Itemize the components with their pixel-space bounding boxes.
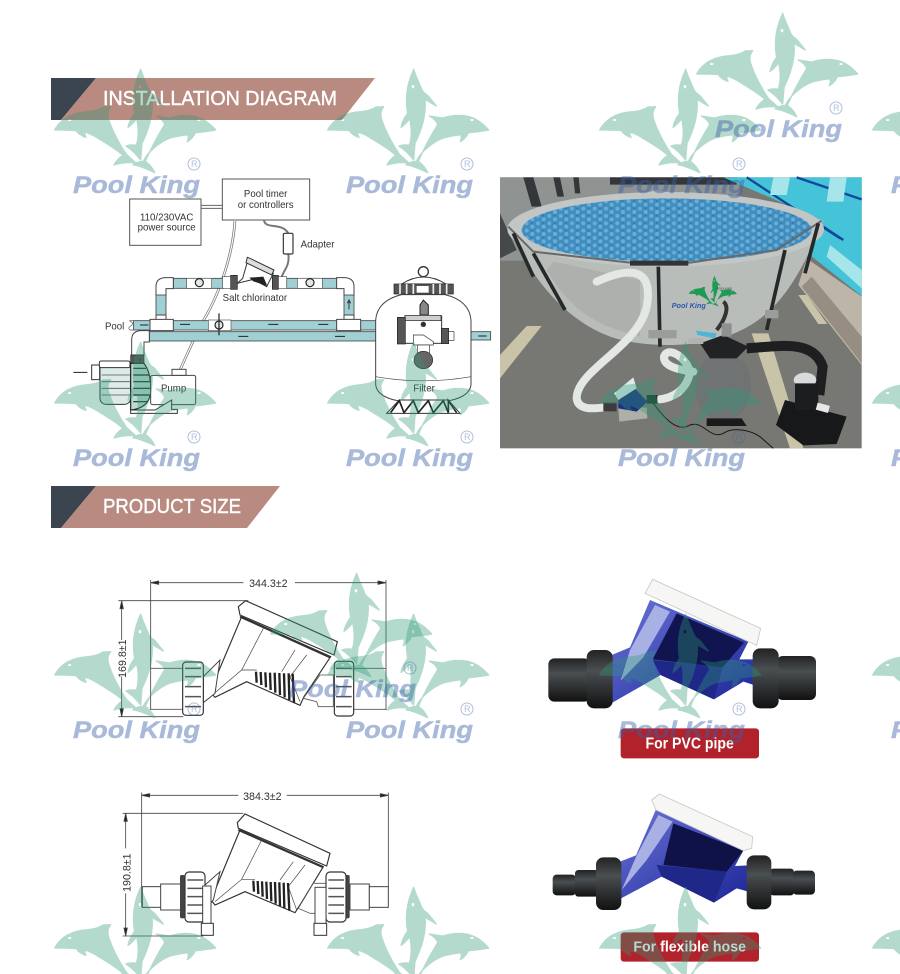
dimension: width: 344.3±2 — [249, 578, 288, 590]
pump: Pump — [161, 384, 186, 395]
watermark row 3 col 1: R — [191, 704, 198, 714]
dimension lines — [118, 580, 386, 717]
watermark row 3 col 4 — [873, 614, 900, 744]
label: for PVC pipe — [621, 728, 759, 758]
chlorinator outline — [205, 814, 330, 913]
watermark row 1 col 3: R — [736, 159, 743, 169]
background swimming pool — [723, 177, 862, 296]
dimension: width: 384.3±2 — [243, 791, 282, 803]
left union nut — [183, 662, 203, 715]
adapter — [264, 220, 335, 277]
ball valves — [187, 278, 322, 335]
watermark row 1 col 2 — [328, 69, 489, 199]
return pipe to pool: Pool — [105, 321, 124, 332]
watermark row 3 col 3 — [600, 614, 761, 744]
product photo: flexible hose version — [553, 794, 815, 962]
filter: Filter — [413, 384, 436, 395]
white control cap — [645, 579, 761, 645]
translucent blue body — [610, 600, 754, 704]
watermark row 1 col 4 — [873, 69, 900, 199]
black hose to pump — [747, 346, 823, 395]
label: for PVC pipe: For PVC pipe — [645, 735, 734, 752]
watermark extra top right: Pool King — [715, 116, 842, 143]
product photo: PVC pipe version — [548, 579, 816, 758]
salt chlorinator — [223, 257, 288, 304]
box: power source: power source — [138, 223, 196, 234]
watermark row 2 col 3: Pool King — [618, 445, 745, 472]
watermark extra top right — [697, 13, 858, 143]
watermark row 3 col 1: Pool King — [73, 717, 200, 744]
heading: installation diagram: INSTALLATION DIAGRAM — [103, 88, 337, 110]
watermark row 3 col 2: Pool King — [346, 717, 473, 744]
black pipe ends — [548, 656, 816, 702]
building backdrop — [500, 177, 740, 261]
adapter: Adapter — [301, 239, 335, 250]
watermark extra over drawing — [271, 573, 432, 703]
hose tails — [142, 884, 388, 910]
watermark row 1 col 1: Pool King — [73, 172, 200, 199]
watermark row 2 col 1: Pool King — [73, 445, 200, 472]
sand filter — [688, 323, 751, 426]
watermark row 2 col 2: R — [464, 432, 471, 442]
right union nut and clip — [314, 872, 350, 935]
watermark row 1 col 3 — [600, 69, 761, 199]
dimension: height: 190.8±1 — [121, 853, 133, 892]
heading: product size: PRODUCT SIZE — [103, 496, 241, 518]
label: for flexible hose: For flexible hose — [633, 939, 746, 955]
watermark row 1 col 3: Pool King — [618, 172, 745, 199]
box: power source — [130, 199, 201, 245]
box: pool timer — [222, 179, 310, 220]
watermark extra over drawing: Pool King — [289, 676, 416, 703]
photo: installed pool set — [500, 177, 862, 448]
salt chlorinator unit — [603, 377, 657, 422]
black hose tails — [553, 869, 815, 897]
heading: product size — [51, 486, 280, 528]
return pipe to pool — [105, 319, 393, 332]
installation diagram — [73, 179, 491, 413]
logo on pool wall — [672, 276, 737, 310]
poolside tiles — [798, 258, 862, 365]
top bypass pipe — [156, 278, 354, 325]
chlorinator outline — [203, 601, 337, 707]
power connector — [201, 205, 222, 208]
watermark row 2 col 1: R — [191, 432, 198, 442]
watermark row 2 col 1 — [55, 342, 216, 472]
box: pool timer: Pool timer — [244, 189, 288, 200]
logo on pool wall: Pool King — [672, 301, 706, 310]
round frame pool — [507, 190, 824, 347]
union nuts — [587, 648, 779, 708]
pump unit — [776, 373, 847, 445]
watermark row 3 col 1 — [55, 614, 216, 744]
translucent blue body — [615, 809, 748, 903]
watermark row 2 col 3: R — [736, 432, 743, 442]
box: pool timer: or controllers — [238, 200, 294, 211]
pipe stubs — [151, 668, 386, 709]
salt chlorinator: Salt chlorinator — [223, 293, 288, 304]
watermark extra top right: R — [833, 103, 840, 113]
watermark row 1 col 1 — [55, 69, 216, 199]
watermark row 1 col 2: Pool King — [346, 172, 473, 199]
flow arrows — [73, 324, 487, 372]
label: for flexible hose — [621, 932, 759, 962]
union nuts — [596, 855, 771, 910]
dimension lines — [123, 793, 388, 936]
watermark row 1 col 1: R — [191, 159, 198, 169]
feed pipe — [132, 331, 491, 355]
dimension drawing: flexible hose version — [121, 791, 388, 936]
pump — [92, 355, 196, 413]
watermark row 2 col 3 — [600, 342, 761, 472]
dimension: height: 169.8±1 — [117, 639, 129, 678]
cable to pump — [180, 220, 235, 370]
power cords — [653, 403, 773, 448]
watermark row 2 col 2: Pool King — [346, 445, 473, 472]
white hoses — [577, 273, 693, 408]
filter — [376, 267, 471, 413]
watermark row 4 dolphins — [55, 887, 900, 974]
left union nut and clip — [180, 872, 213, 935]
watermark extra over drawing: R — [407, 663, 414, 673]
box: power source: 110/230VAC — [140, 212, 193, 223]
watermark row 2 col 2 — [328, 342, 489, 472]
heading: installation diagram — [51, 78, 375, 120]
watermark row 3 col 3: Pool King — [618, 717, 745, 744]
watermark row 2 col 4 — [873, 342, 900, 472]
inlet hose on the wall — [717, 302, 726, 330]
watermark row 1 col 2: R — [464, 159, 471, 169]
watermark row 3 col 2: R — [464, 704, 471, 714]
dimension drawing: PVC pipe version — [117, 578, 386, 717]
right union nut — [334, 661, 354, 716]
watermark row 3 col 3: R — [736, 704, 743, 714]
logo on pool wall: POOLKING — [717, 286, 733, 290]
watermark row 3 col 2 — [328, 614, 489, 744]
white control cap — [652, 794, 753, 851]
paving stripes — [500, 295, 827, 448]
